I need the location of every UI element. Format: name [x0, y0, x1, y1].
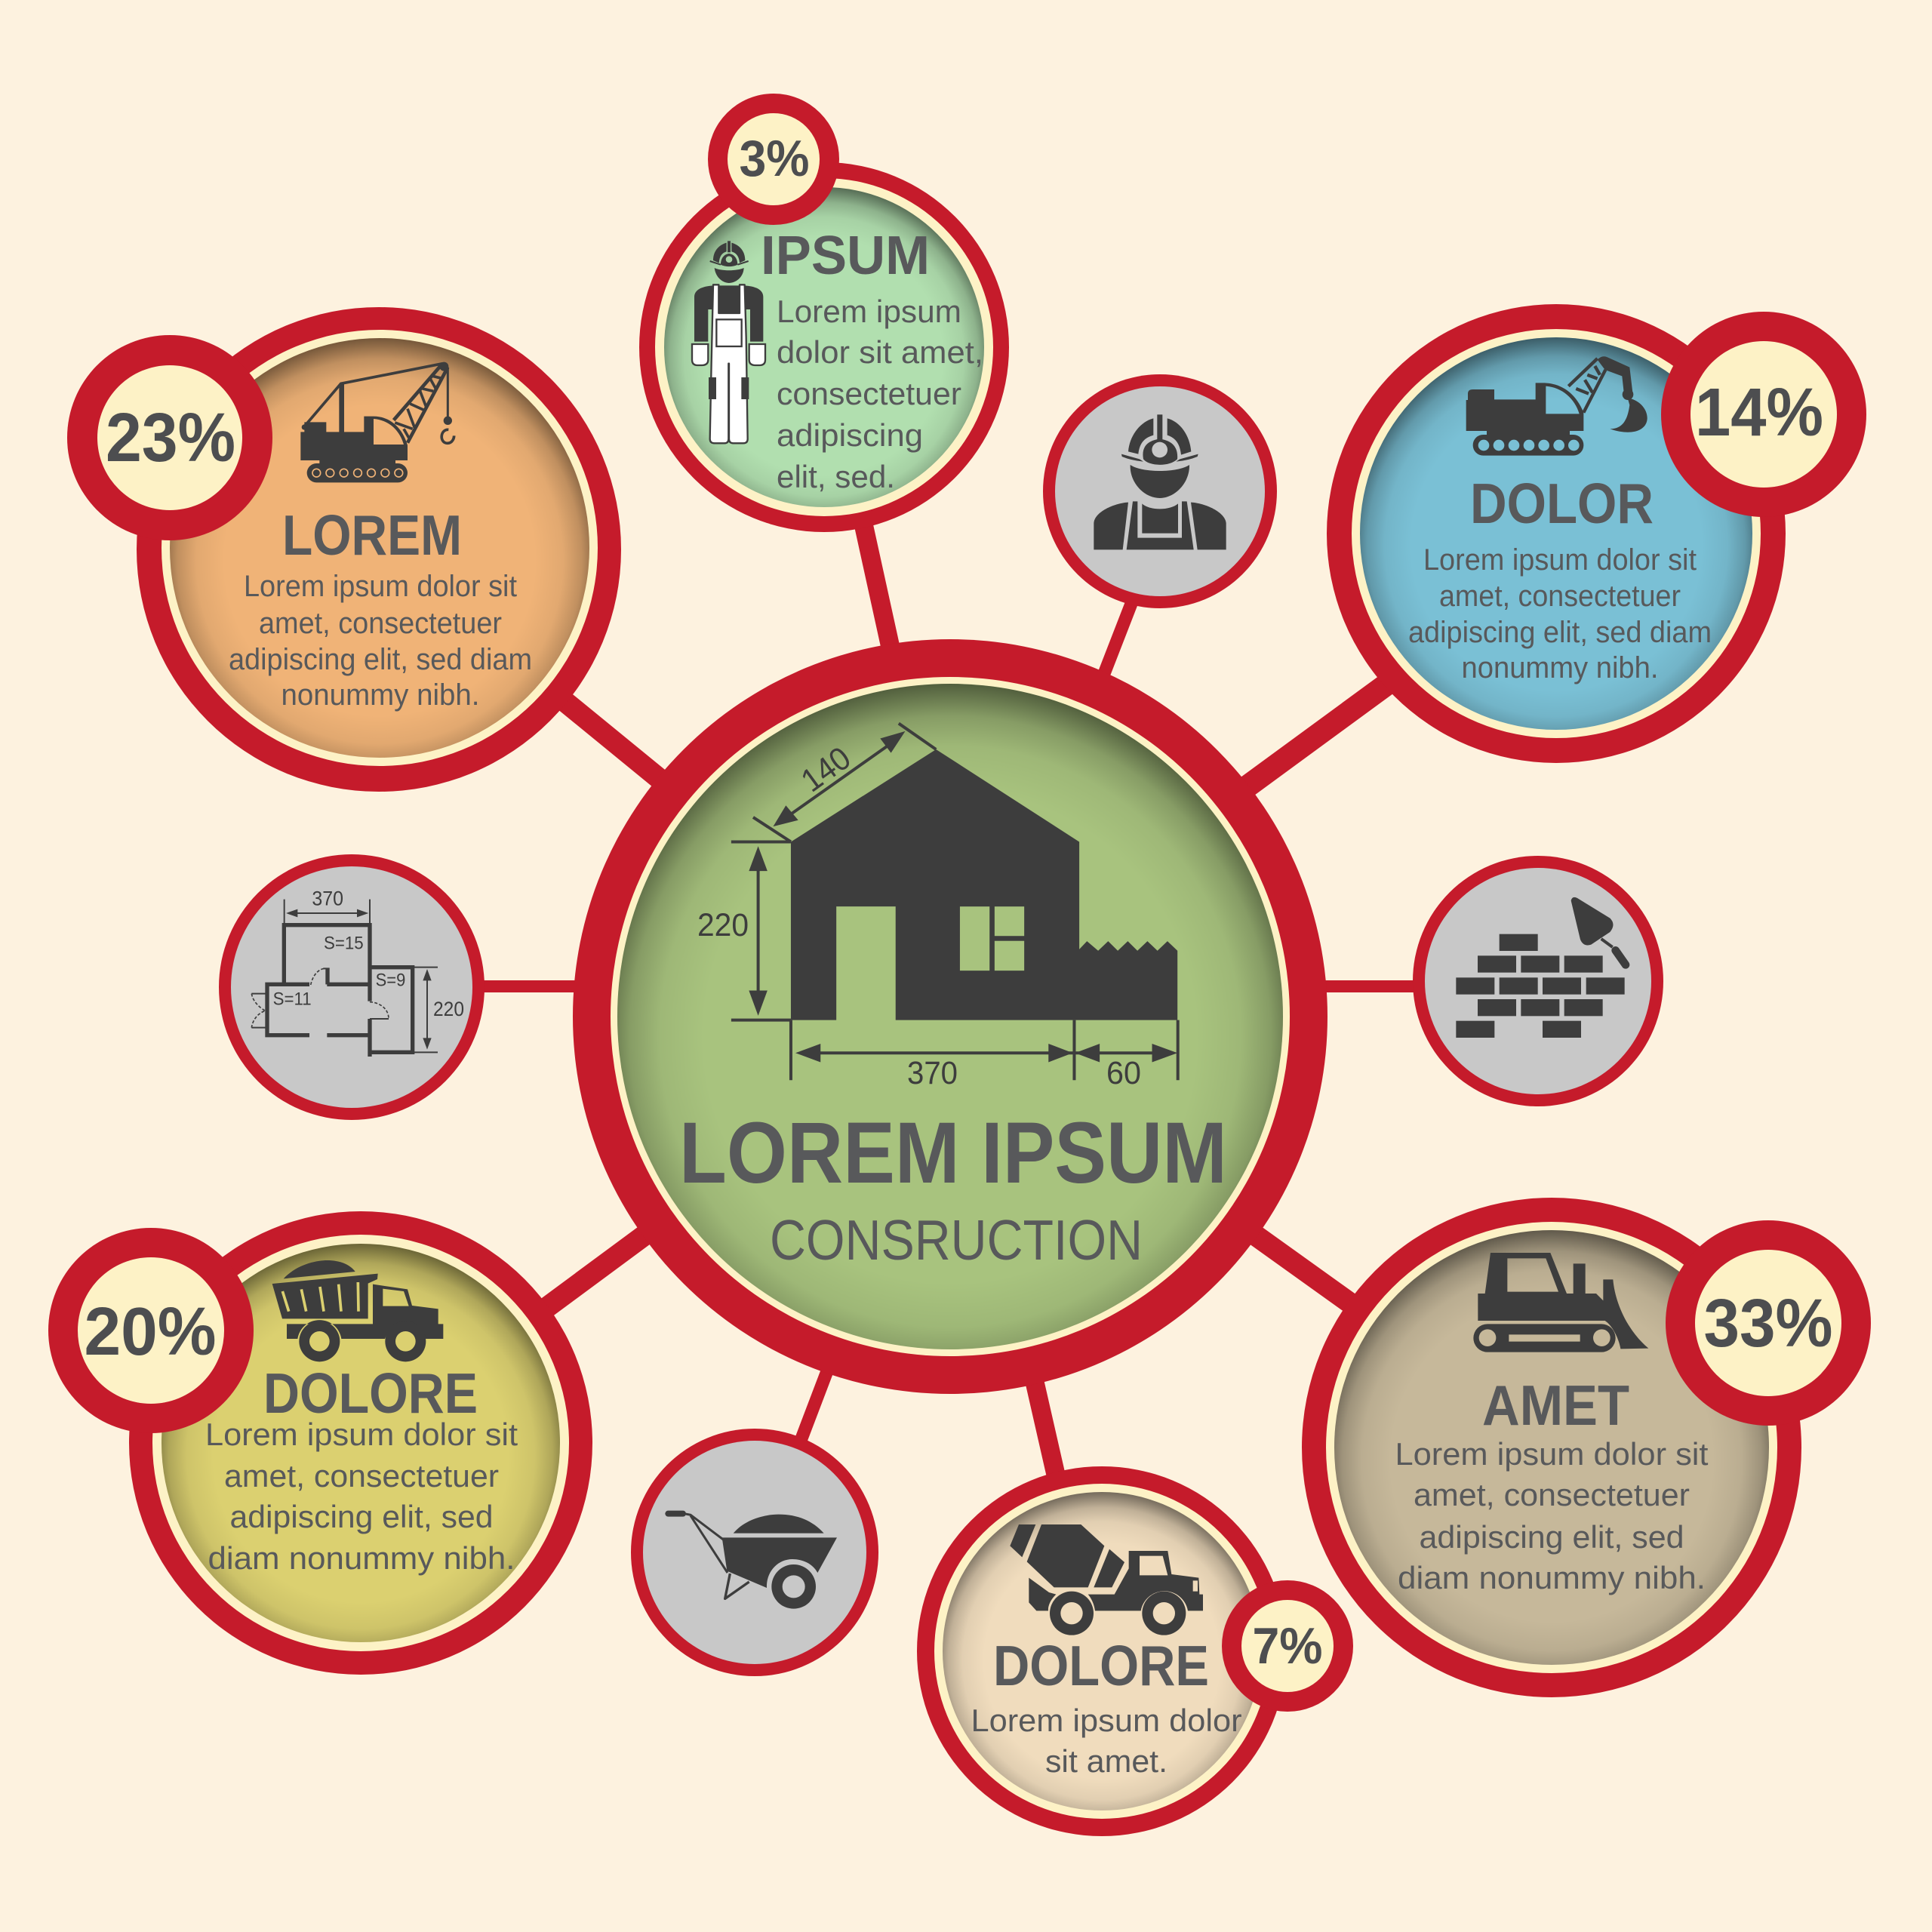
text block: dolor: Lorem ipsum dolor sit — [1423, 543, 1697, 577]
text block: dolore truck: amet, consectetuer — [224, 1458, 499, 1494]
subtitle: CONSRUCTION — [770, 1208, 1143, 1272]
text block: dolor — [1408, 543, 1712, 685]
icon: house with dimensions: 60 — [1106, 1055, 1141, 1091]
icon circle: floor plan: 220 — [433, 998, 464, 1020]
panel: amet 33% — [1302, 1198, 1871, 1697]
text block: dolore truck: Lorem ipsum dolor sit — [205, 1417, 518, 1452]
badge: 20%: 20% — [85, 1294, 216, 1370]
text block: ipsum: adipiscing — [777, 417, 923, 453]
badge: 33%: 33% — [1704, 1286, 1832, 1361]
icon circle: floor plan: S=9 — [376, 971, 405, 991]
icon circle: wheelbarrow — [631, 1429, 878, 1676]
text block: dolor: nonummy nibh. — [1461, 651, 1659, 685]
badge: 3%: 3% — [740, 130, 809, 187]
text block: dolor: amet, consectetuer — [1439, 580, 1681, 613]
icon: house with dimensions: 370 — [907, 1055, 958, 1091]
text block: dolore mixer: sit amet. — [1045, 1743, 1168, 1779]
icon: standing worker — [692, 241, 765, 443]
badge: 33% — [1666, 1220, 1871, 1426]
text block: ipsum: dolor sit amet, — [777, 334, 983, 370]
badge: 23%: 23% — [106, 399, 235, 476]
icon: house with dimensions: 140 — [795, 740, 857, 799]
heading: dolore truck: DOLORE — [263, 1361, 478, 1425]
text block: lorem: amet, consectetuer — [259, 607, 502, 640]
icon circle: bricks and trowel — [1413, 856, 1663, 1106]
text block: ipsum: Lorem ipsum — [777, 294, 961, 329]
icon: bulldozer — [1473, 1253, 1648, 1352]
heading: amet: AMET — [1482, 1374, 1629, 1437]
icon: cement mixer — [1010, 1524, 1203, 1635]
text block: ipsum — [777, 294, 983, 494]
badge: 3% — [708, 94, 839, 225]
badge: 7% — [1222, 1580, 1353, 1712]
text block: ipsum: elit, sed. — [777, 459, 895, 494]
panel: ipsum 3% — [639, 94, 1009, 532]
icon circle: floor plan: S=11 — [273, 989, 312, 1010]
text block: dolore mixer: Lorem ipsum dolor — [971, 1703, 1242, 1738]
badge: 14% — [1661, 312, 1866, 517]
heading: dolor: DOLOR — [1470, 472, 1654, 535]
text block: amet: Lorem ipsum dolor sit — [1395, 1436, 1709, 1472]
icon: excavator — [1466, 356, 1647, 456]
icon: house with dimensions: 220 — [697, 907, 749, 943]
icon: house with dimensions — [697, 724, 1178, 1091]
text block: lorem: nonummy nibh. — [281, 678, 480, 712]
heading: dolore mixer: DOLORE — [993, 1634, 1209, 1697]
text block: amet — [1395, 1436, 1709, 1595]
text block: amet: amet, consectetuer — [1414, 1477, 1690, 1512]
text block: dolore truck: adipiscing elit, sed — [229, 1499, 494, 1534]
icon circle: floor plan: 370 — [312, 887, 343, 909]
icon circle: worker bust — [1043, 374, 1277, 608]
badge: 23% — [67, 335, 272, 540]
icon: dump truck — [272, 1260, 443, 1361]
text block: dolor: adipiscing elit, sed diam — [1408, 616, 1712, 649]
icon circle: floor plan — [219, 854, 485, 1120]
connector lines — [352, 493, 1552, 1491]
icon circle: floor plan: S=15 — [324, 933, 364, 953]
text block: ipsum: consectetuer — [777, 376, 961, 411]
panel: dolor 14% — [1327, 304, 1866, 763]
text block: amet: adipiscing elit, sed — [1419, 1519, 1684, 1555]
heading: lorem: LOREM — [282, 503, 462, 567]
badge: 7%: 7% — [1253, 1617, 1322, 1675]
badge: 20% — [48, 1228, 254, 1433]
text block: amet: diam nonummy nibh. — [1398, 1560, 1706, 1595]
panel: center construction — [573, 639, 1327, 1394]
text block: dolore truck — [205, 1417, 518, 1576]
heading: ipsum: IPSUM — [761, 226, 930, 286]
text block: dolore truck: diam nonummy nibh. — [208, 1540, 515, 1576]
icon: crane — [300, 362, 454, 482]
title: LOREM IPSUM — [679, 1105, 1227, 1201]
text block: lorem: adipiscing elit, sed diam — [229, 643, 532, 676]
text block: lorem: Lorem ipsum dolor sit — [244, 570, 517, 603]
panel: dolore mixer 7% — [917, 1466, 1353, 1836]
text block: lorem — [229, 570, 532, 712]
badge: 14%: 14% — [1695, 375, 1823, 451]
panel: dolore truck 20% — [48, 1211, 592, 1675]
text block: dolore mixer — [971, 1703, 1242, 1779]
panel: lorem 23% — [67, 307, 621, 792]
